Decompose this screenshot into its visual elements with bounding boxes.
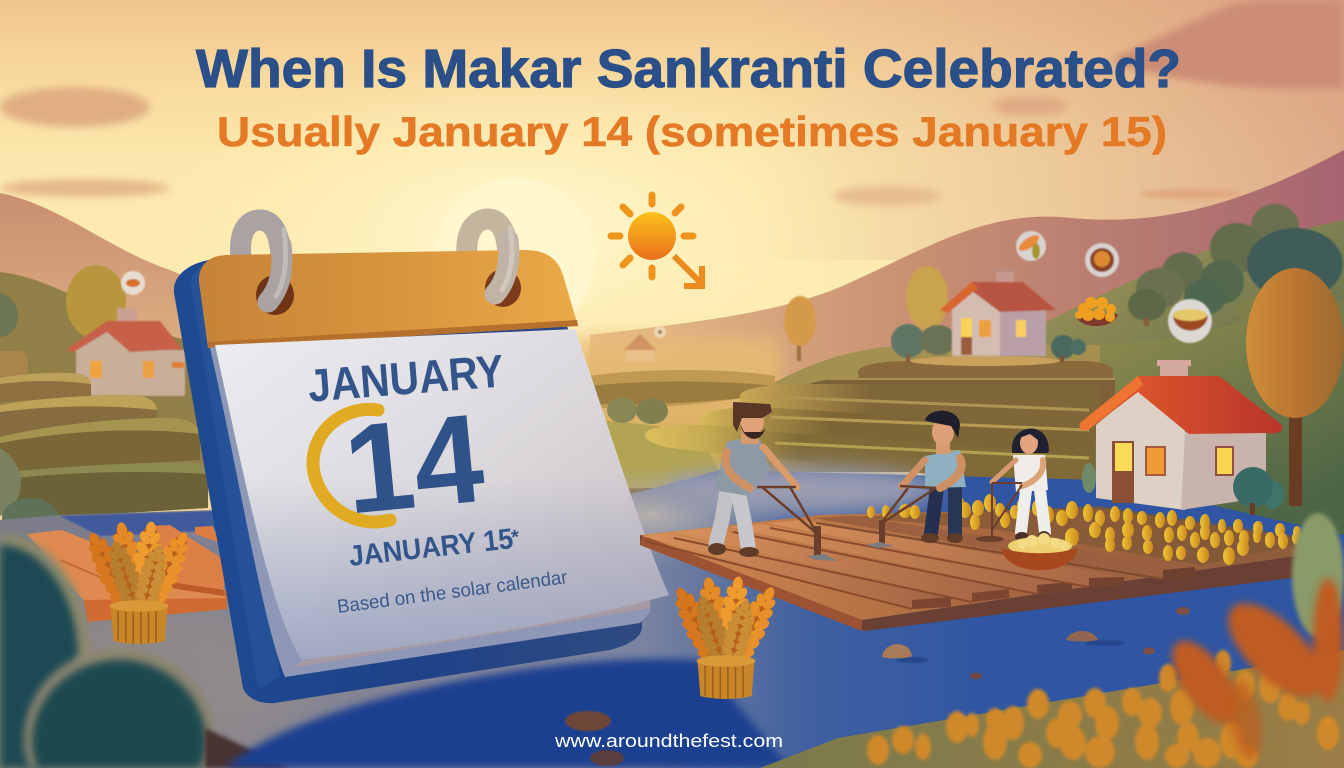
orange header xyxy=(199,250,578,348)
subtitle: Usually January 14 (sometimes January 15) xyxy=(217,108,1167,155)
farmer woman xyxy=(976,429,1050,542)
ring right back xyxy=(467,219,508,255)
plank 4 xyxy=(767,520,1124,587)
bowl of grain xyxy=(1001,533,1078,570)
stones left xyxy=(565,711,624,766)
near house xyxy=(1080,360,1284,515)
food icons right xyxy=(1016,231,1212,343)
far right house xyxy=(891,266,1086,363)
farmer man with beard xyxy=(708,402,838,561)
ring fronts xyxy=(268,245,282,302)
central hazy ground xyxy=(575,338,780,520)
left ball tree xyxy=(0,293,18,337)
plank 2 xyxy=(671,528,1009,602)
farmer man center xyxy=(866,411,966,548)
plank 1 xyxy=(642,533,951,609)
dark foreground bushes left xyxy=(0,533,290,768)
icon: fish and leaf xyxy=(1016,231,1046,261)
left planks xyxy=(27,525,228,622)
page xyxy=(215,329,669,660)
sun icon with down arrow xyxy=(611,195,702,286)
mid tree and distant house xyxy=(624,296,816,362)
left tree xyxy=(66,265,126,339)
wheat sheaf center xyxy=(663,574,788,699)
right tree xyxy=(1246,268,1344,506)
background trees right xyxy=(1128,204,1343,326)
bushes xyxy=(0,448,21,516)
title: When Is Makar Sankranti Celebrated? xyxy=(196,39,1181,99)
sun glow behind calendar xyxy=(435,178,595,338)
floor xyxy=(0,465,1344,768)
stones xyxy=(882,607,1190,680)
icon: rice bowl xyxy=(1168,299,1212,343)
ring left back xyxy=(241,220,281,258)
binding holes xyxy=(256,275,294,315)
website url: www.aroundthefest.com xyxy=(554,731,783,751)
hills xyxy=(0,150,1344,540)
olive hill behind terraces xyxy=(770,344,1100,440)
solar calendar note: Based on the solar calendar xyxy=(336,567,569,618)
month text: JANUARY xyxy=(306,344,505,412)
icon: left food bubble xyxy=(121,271,145,295)
golden crop field xyxy=(867,494,1332,565)
gold circle arc xyxy=(313,409,390,522)
planting platform xyxy=(640,506,1322,631)
plank 3 xyxy=(730,524,1072,594)
icon: round dish xyxy=(1085,243,1119,277)
board xyxy=(174,259,642,703)
right terraces xyxy=(645,356,1115,480)
calendar xyxy=(174,219,669,703)
central terrace and plain xyxy=(580,370,775,500)
sky background xyxy=(0,0,1344,420)
foreground slope with blurred crops xyxy=(760,513,1344,768)
alternate date: JANUARY 15 xyxy=(347,523,515,573)
day number: 14 xyxy=(338,387,489,540)
icon: laddu bowl xyxy=(1075,297,1118,326)
plank 5 xyxy=(813,516,1195,579)
asterisk: * xyxy=(510,526,520,549)
under pages xyxy=(210,346,650,677)
wheat sheaf left xyxy=(76,519,201,644)
left house xyxy=(67,308,185,396)
left scenery xyxy=(0,265,208,538)
left terraces xyxy=(0,351,208,517)
calendar shadow xyxy=(225,659,790,768)
clouds xyxy=(0,0,1344,206)
